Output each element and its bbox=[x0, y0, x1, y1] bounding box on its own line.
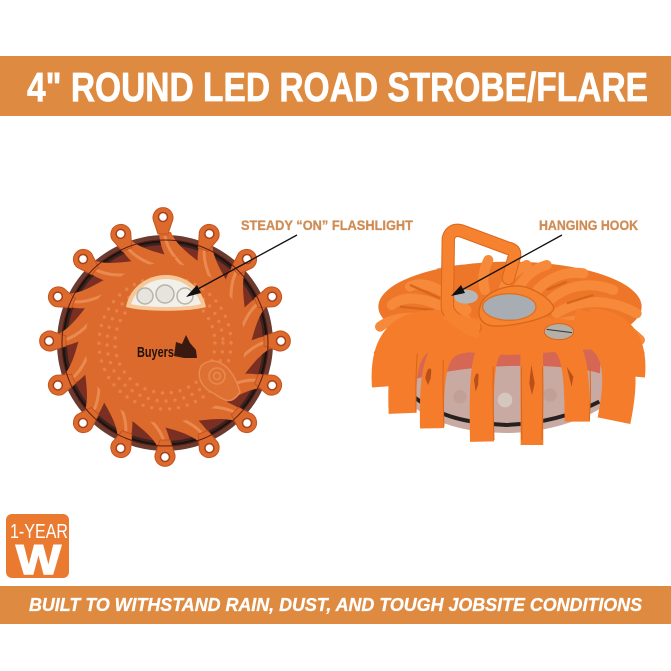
brand logo: Buyers bbox=[137, 344, 174, 361]
hanging loops bbox=[40, 208, 290, 466]
magnet bbox=[483, 294, 536, 320]
lens body bbox=[57, 235, 273, 451]
hanging hook bbox=[447, 230, 515, 327]
icon: dog mascot bbox=[174, 335, 197, 358]
warranty W: W bbox=[16, 536, 61, 583]
warranty badge bbox=[6, 514, 69, 583]
arrow: to flashlight bbox=[186, 235, 297, 297]
lens body bbox=[407, 337, 605, 433]
label: hanging hook: HANGING HOOK bbox=[539, 218, 638, 233]
label: steady on flashlight: STEADY “ON” FLASHLIGHT bbox=[241, 218, 414, 233]
bottom banner bbox=[0, 586, 671, 624]
product: angled view of flare with hook bbox=[373, 230, 645, 445]
front screw bbox=[544, 324, 574, 340]
rear screw bbox=[454, 290, 478, 304]
orange top surface bbox=[378, 260, 642, 352]
flashlight window bbox=[126, 275, 206, 311]
warranty years: 1-YEAR bbox=[10, 521, 68, 543]
spokes bbox=[48, 224, 282, 458]
hook lower pad bbox=[443, 310, 481, 338]
arrow: to hanging hook bbox=[451, 235, 562, 296]
top banner bbox=[0, 56, 671, 116]
central disc with dots bbox=[85, 263, 245, 423]
strap shading lines bbox=[416, 353, 590, 440]
strap slots bbox=[425, 365, 573, 395]
front surface band bbox=[373, 317, 645, 355]
raised magnet seat bbox=[479, 286, 554, 326]
product: front view of round LED flare bbox=[40, 208, 290, 466]
front straps bbox=[383, 318, 635, 445]
tagline: BUILT TO WITHSTAND RAIN, DUST, AND TOUGH JOBSITE CONDITIONS bbox=[29, 595, 642, 615]
outline ring bbox=[62, 240, 268, 446]
power button bbox=[199, 361, 240, 401]
brand logo bbox=[137, 335, 197, 361]
